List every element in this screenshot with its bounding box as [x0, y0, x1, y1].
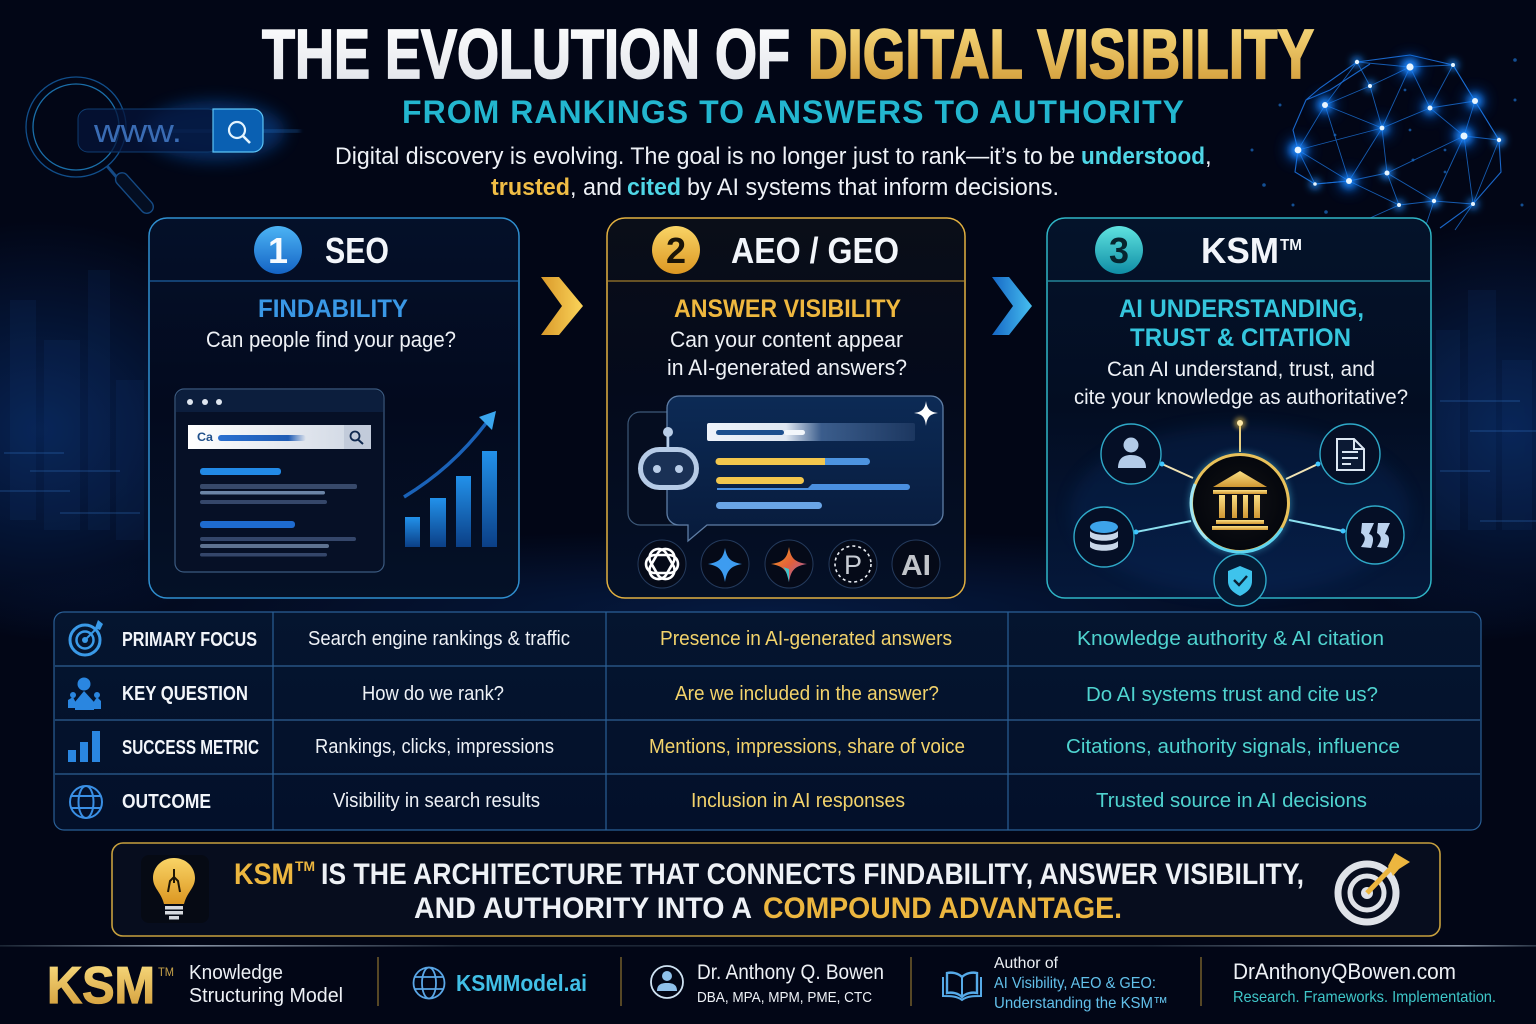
callout text: AND AUTHORITY INTO A: [414, 892, 752, 925]
intro text: understood: [1081, 143, 1205, 170]
AI platform icons: [638, 540, 940, 588]
question: Can your content appear: [670, 327, 903, 352]
footer KSM logo: [47, 957, 343, 1015]
icon: shield: [1214, 554, 1266, 606]
icon: temple: [1212, 471, 1268, 530]
icon: document: [1337, 439, 1364, 470]
icon: light bulb: [141, 855, 209, 923]
icon: globe: [70, 786, 102, 818]
arrow: blue chevron: [992, 277, 1032, 335]
row: outcome: [70, 786, 1367, 818]
footer author: DBA, MPA, MPM, PME, CTC: [697, 989, 872, 1006]
AEO value: Inclusion in AI responses: [691, 790, 905, 812]
callout text: COMPOUND ADVANTAGE.: [763, 892, 1122, 925]
illustration: knowledge hub network: [1070, 417, 1410, 606]
question: [667, 327, 907, 380]
question: Can people find your page?: [206, 327, 456, 352]
subheading AI understanding: AI UNDERSTANDING,: [1119, 295, 1364, 323]
heading KSM: TM: [1280, 237, 1302, 254]
KSM value: Citations, authority signals, influence: [1066, 736, 1400, 758]
icon: target with gold arrow: [1338, 853, 1410, 922]
badge 2: 2: [666, 230, 686, 271]
footer personal site: Research. Frameworks. Implementation.: [1233, 989, 1496, 1006]
KSM value: Trusted source in AI decisions: [1096, 790, 1367, 812]
AEO value: Presence in AI-generated answers: [660, 628, 952, 650]
footer author: Dr. Anthony Q. Bowen: [697, 961, 884, 984]
label: KEY QUESTION: [122, 683, 248, 705]
footer book: Author of: [994, 955, 1059, 972]
label: OUTCOME: [122, 791, 211, 813]
KSM value: Do AI systems trust and cite us?: [1086, 684, 1378, 706]
intro text: by AI systems that inform decisions.: [687, 174, 1059, 201]
subheading findability: FINDABILITY: [258, 295, 408, 323]
KSM value: Knowledge authority & AI citation: [1077, 628, 1384, 650]
footer KSM logo: TM: [158, 965, 174, 979]
footer KSM logo: Knowledge: [189, 962, 283, 984]
heading AEO GEO: AEO / GEO: [731, 230, 899, 271]
callout text: IS THE ARCHITECTURE THAT CONNECTS FINDABILITY, ANSWER VISIBILITY,: [321, 858, 1304, 891]
footer book: [943, 955, 1168, 1012]
question: in AI-generated answers?: [667, 355, 907, 380]
callout banner: [112, 843, 1440, 936]
arrow: gold chevron: [541, 277, 583, 335]
label: PRIMARY FOCUS: [122, 629, 257, 651]
icon: target: [70, 620, 103, 655]
icon: magnifier and www search bar: [26, 77, 300, 216]
callout text: KSM: [234, 858, 294, 891]
footer book: Understanding the KSM™: [994, 995, 1168, 1012]
footer website: KSMModel.ai: [456, 970, 587, 996]
illustration: AI chat bubble with robot: [628, 396, 943, 541]
label: SUCCESS METRIC: [122, 737, 259, 759]
comparison table: [54, 612, 1481, 830]
subheading answer visibility: ANSWER VISIBILITY: [674, 295, 901, 323]
subheading AI understanding: [1119, 295, 1364, 352]
SEO value: Visibility in search results: [333, 790, 540, 812]
title: [262, 15, 1314, 93]
badge 1: 1: [268, 230, 288, 271]
illustration: browser search results: [175, 389, 384, 572]
intro text: trusted: [491, 174, 570, 201]
footer personal site: DrAnthonyQBowen.com: [1233, 959, 1456, 984]
panel: SEO: [149, 218, 519, 598]
icon: people: [68, 678, 101, 710]
icon: quotes: [1361, 523, 1390, 548]
AEO value: Are we included in the answer?: [675, 683, 939, 705]
illustration: browser search results: Ca: [197, 430, 213, 444]
footer book: AI Visibility, AEO & GEO:: [994, 975, 1156, 992]
footer KSM logo: KSM: [47, 957, 155, 1015]
heading KSM: KSM: [1201, 230, 1279, 271]
badge 3: 3: [1109, 230, 1129, 271]
panel: AEO / GEO: [607, 218, 965, 598]
AEO value: Mentions, impressions, share of voice: [649, 736, 965, 758]
www text: www.: [93, 113, 182, 149]
title: DIGITAL VISIBILITY: [808, 15, 1314, 93]
SEO value: How do we rank?: [362, 683, 504, 705]
chart: rising bars with arrow: [404, 411, 497, 547]
intro text: ,: [1205, 143, 1212, 170]
question: cite your knowledge as authoritative?: [1074, 386, 1408, 409]
row: primary focus: [70, 620, 1384, 655]
icon: bars: [68, 731, 100, 762]
footer website: [414, 968, 587, 998]
row: success metric: [68, 731, 1400, 762]
icon: neural network brain: [1250, 55, 1524, 230]
question: [1074, 358, 1408, 409]
callout text: [234, 858, 1304, 925]
badge 2: [652, 226, 700, 274]
panel: KSM: [1047, 218, 1431, 606]
question: Can AI understand, trust, and: [1107, 358, 1375, 381]
intro text: Digital discovery is evolving. The goal is no longer just to rank—it’s to be: [335, 143, 1075, 170]
badge 1: [254, 226, 302, 274]
icon: database: [1090, 521, 1118, 551]
SEO value: Search engine rankings & traffic: [308, 628, 570, 650]
row: key question: [68, 678, 1378, 710]
SEO value: Rankings, clicks, impressions: [315, 736, 554, 758]
title: THE EVOLUTION OF: [262, 15, 790, 93]
intro text: , and: [570, 174, 622, 201]
AI platform icons: AI: [901, 550, 931, 582]
icon: robot head: [640, 427, 696, 488]
footer KSM logo: Structuring Model: [189, 985, 343, 1007]
subheading AI understanding: TRUST & CITATION: [1130, 324, 1351, 352]
footer: [0, 945, 1536, 1015]
heading SEO: SEO: [325, 230, 389, 271]
intro text: [335, 143, 1212, 201]
footer author: [651, 961, 884, 1006]
callout text: TM: [295, 858, 315, 874]
intro text: cited: [627, 174, 681, 201]
icon: person: [1118, 438, 1146, 468]
subtitle: FROM RANKINGS TO ANSWERS TO AUTHORITY: [402, 94, 1184, 130]
AI platform icons: P: [844, 550, 862, 580]
badge 3: [1095, 226, 1143, 274]
footer personal site: [1233, 959, 1496, 1006]
